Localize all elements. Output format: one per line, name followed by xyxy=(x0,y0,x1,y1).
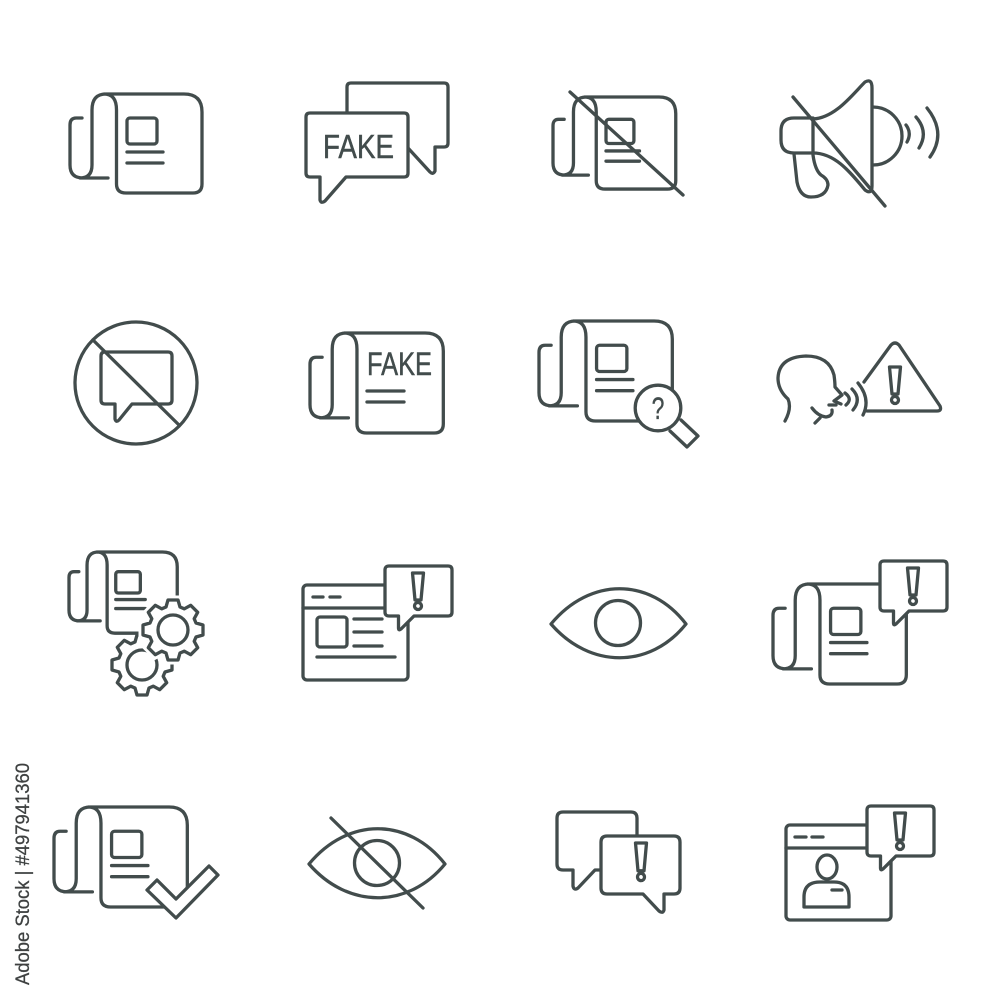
icon: newspaper xyxy=(70,94,202,193)
icon: newspaper with alert xyxy=(773,561,947,684)
icon: crossed-out eye xyxy=(309,818,445,908)
icon: newspaper under magnifier: ? xyxy=(652,391,664,426)
icon: fake newspaper xyxy=(310,333,443,433)
icon: crossed-out newspaper xyxy=(553,92,683,195)
icon: fake newspaper: FAKE xyxy=(367,346,432,382)
icon: muted megaphone xyxy=(781,81,938,206)
icon: speech bubbles with alert xyxy=(557,812,680,912)
icon: no messages xyxy=(75,322,197,444)
icon: speaking head with warning xyxy=(778,343,941,423)
icon: fake speech bubbles: FAKE xyxy=(323,128,394,165)
icon: newspaper with gears xyxy=(69,552,203,695)
icon: browser profile with alert xyxy=(786,806,934,920)
icon: verified newspaper xyxy=(54,807,218,918)
icon: newspaper under magnifier xyxy=(539,321,698,447)
icon: eye xyxy=(551,589,686,658)
icon: fake speech bubbles xyxy=(306,83,448,202)
side credit text: Adobe Stock | #497941360 xyxy=(13,763,34,985)
icon: browser page with alert xyxy=(303,566,452,680)
